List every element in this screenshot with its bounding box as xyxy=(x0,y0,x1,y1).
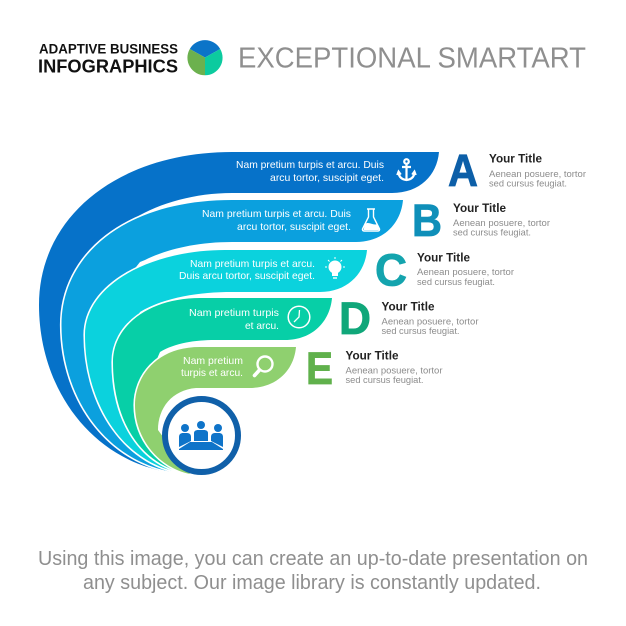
icon: anchor xyxy=(397,159,416,180)
band E text xyxy=(181,355,243,379)
item E text: Your Title xyxy=(346,350,398,362)
letter E: E xyxy=(306,343,333,394)
item D text xyxy=(382,302,478,337)
item C text: Aenean posuere, tortor xyxy=(417,267,514,278)
item D text: Your Title xyxy=(382,302,434,314)
letter D: D xyxy=(339,293,371,344)
band C xyxy=(85,250,367,474)
item B text xyxy=(453,203,550,238)
icon: meeting people xyxy=(179,421,223,450)
item E text: Aenean posuere, tortor xyxy=(346,366,442,376)
icon: logo pie xyxy=(187,40,223,75)
item D text: Aenean posuere, tortor xyxy=(382,316,478,328)
item C text: sed cursus feugiat. xyxy=(417,277,495,288)
item A text: Your Title xyxy=(489,154,542,166)
centre circle with people icon xyxy=(165,399,238,472)
title: EXCEPTIONAL SMARTART xyxy=(238,42,586,74)
letter B: B xyxy=(412,195,442,246)
band C text: Nam pretium turpis et arcu. xyxy=(190,258,315,270)
footer text xyxy=(38,548,588,594)
band D text: et arcu. xyxy=(245,320,279,332)
item D text: sed cursus feugiat. xyxy=(382,326,460,337)
letter A: A xyxy=(448,145,478,196)
band C text xyxy=(179,258,315,282)
band B text xyxy=(202,208,351,233)
band A xyxy=(39,152,439,474)
item A text: Aenean posuere, tortor xyxy=(489,169,586,180)
band C text: Duis arcu tortor, suscipit eget. xyxy=(179,270,315,282)
band D text: Nam pretium turpis xyxy=(189,307,279,319)
band B text: Nam pretium turpis et arcu. Duis xyxy=(202,208,351,220)
item C text: Your Title xyxy=(417,252,470,264)
band D text xyxy=(189,307,279,332)
item A xyxy=(448,145,586,196)
icon: light bulb xyxy=(325,257,345,278)
item A text: sed cursus feugiat. xyxy=(489,178,567,190)
footer text: Using this image, you can create an up-to-date presentation on xyxy=(38,548,588,570)
header xyxy=(38,40,586,76)
brand name xyxy=(38,42,178,76)
band E text: Nam pretium xyxy=(183,355,243,367)
icon: clock xyxy=(288,306,310,328)
item B text: Aenean posuere, tortor xyxy=(453,218,550,229)
item B text: sed cursus feugiat. xyxy=(453,228,531,238)
funnel chart xyxy=(39,152,439,474)
band B xyxy=(62,200,403,474)
band D xyxy=(113,298,332,474)
band A text: arcu tortor, suscipit eget. xyxy=(270,172,384,184)
footer text: any subject. Our image library is constantly updated. xyxy=(83,572,541,594)
item A text xyxy=(489,154,586,190)
item B xyxy=(412,195,550,246)
band B text: arcu tortor, suscipit eget. xyxy=(237,221,351,233)
item D xyxy=(339,293,478,344)
icon: magnifier xyxy=(254,356,272,376)
item E xyxy=(306,343,442,394)
band E xyxy=(135,347,296,474)
band A text xyxy=(236,159,384,184)
item E text xyxy=(346,350,442,386)
band E text: turpis et arcu. xyxy=(181,367,243,379)
icon: flask xyxy=(362,209,380,231)
item B text: Your Title xyxy=(453,203,506,215)
brand name: INFOGRAPHICS xyxy=(38,56,178,76)
item E text: sed cursus feugiat. xyxy=(346,375,424,386)
item C text xyxy=(417,252,514,288)
item C xyxy=(375,244,514,296)
letter C: C xyxy=(375,244,407,296)
band A text: Nam pretium turpis et arcu. Duis xyxy=(236,159,384,171)
brand name: ADAPTIVE BUSINESS xyxy=(39,42,178,56)
